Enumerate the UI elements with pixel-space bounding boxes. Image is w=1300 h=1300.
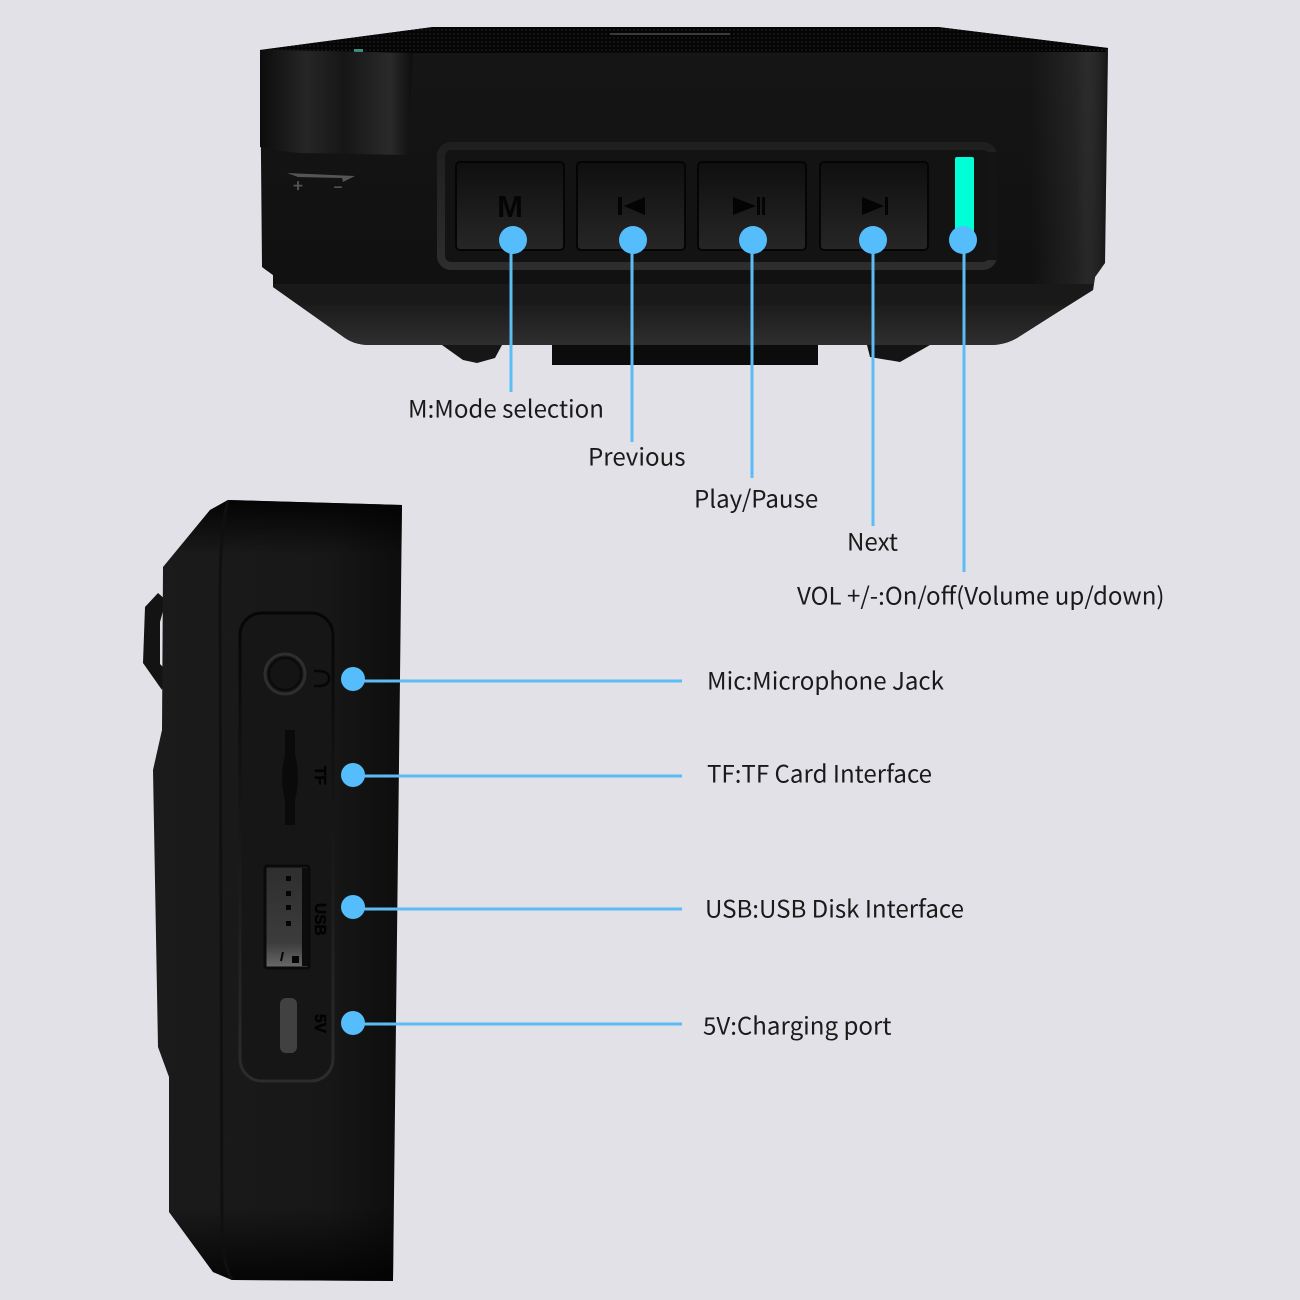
lower body bands	[260, 52, 1110, 345]
speaker body	[260, 27, 1108, 345]
usb port	[265, 866, 328, 968]
body shading	[174, 500, 402, 1281]
micro usb port	[280, 998, 328, 1053]
callout next: Next	[847, 522, 898, 558]
callout previous: Previous	[588, 438, 685, 472]
volume mark: –	[333, 172, 343, 197]
callout mic: Mic:Microphone Jack	[707, 662, 945, 696]
side body	[153, 500, 402, 1281]
button next	[820, 162, 928, 250]
callout mode: M:Mode selection	[408, 390, 604, 424]
volume knob	[260, 50, 413, 155]
callout charging: 5V:Charging port	[703, 1006, 891, 1042]
left clip foot	[442, 345, 502, 363]
tf slot: TF	[311, 766, 328, 785]
callout charging	[341, 1006, 891, 1042]
callout previous	[588, 226, 685, 472]
callouts side	[341, 662, 964, 1042]
callouts top	[408, 226, 1165, 612]
volume led	[955, 157, 974, 247]
micro usb port: 5V	[311, 1014, 328, 1034]
callout play pause	[694, 226, 818, 514]
button play pause	[698, 162, 806, 250]
usb port: USB	[311, 903, 328, 936]
callout tf: TF:TF Card Interface	[707, 754, 932, 790]
callout usb	[341, 890, 964, 924]
button M	[456, 162, 564, 250]
volume mark	[287, 172, 355, 197]
strap loop	[143, 593, 166, 690]
callout next	[847, 226, 898, 558]
volume mark: +	[293, 172, 303, 197]
button M: M	[497, 189, 523, 224]
callout usb: USB:USB Disk Interface	[705, 890, 964, 924]
button previous	[577, 162, 685, 250]
callout mic	[341, 662, 945, 696]
top grille	[260, 27, 1108, 53]
control panel	[441, 146, 998, 266]
speaker top view	[260, 27, 1110, 365]
port panel	[240, 613, 333, 1081]
callout volume: VOL +/-:On/off(Volume up/down)	[797, 576, 1165, 612]
right clip foot	[867, 345, 930, 362]
speaker side view	[143, 500, 410, 1285]
callout tf	[341, 754, 932, 790]
callout volume	[797, 226, 1165, 612]
callout mode	[408, 226, 604, 424]
tf slot	[282, 730, 328, 825]
mic jack	[265, 654, 329, 694]
callout play pause: Play/Pause	[694, 480, 818, 514]
grille logo	[610, 33, 730, 35]
belt clip	[552, 340, 818, 365]
power indicator	[354, 49, 363, 52]
